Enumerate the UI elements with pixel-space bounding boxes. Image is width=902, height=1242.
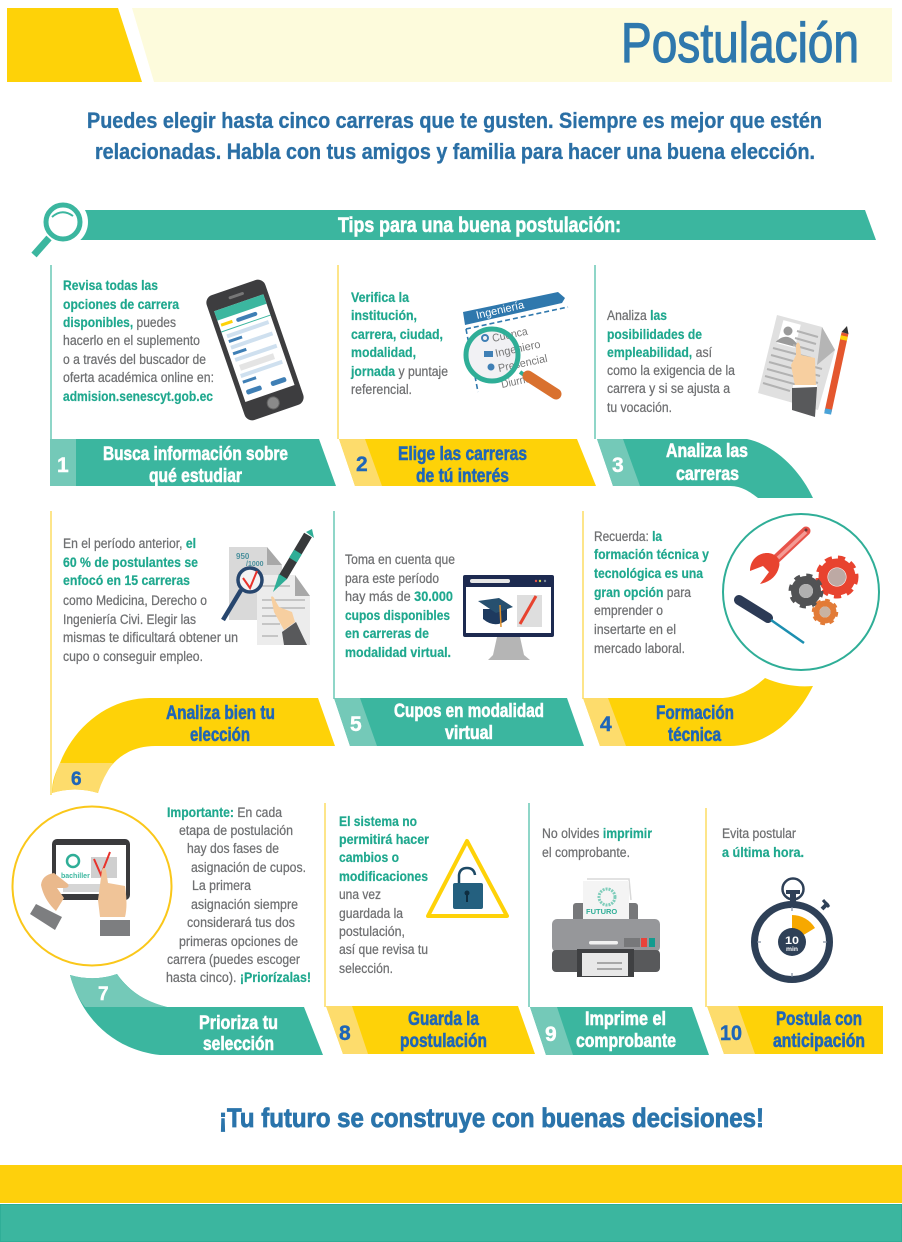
ribbon 5: 5 bbox=[350, 713, 362, 736]
text block 8: postulación, bbox=[339, 924, 405, 939]
icon: tablet circle: bachiller bbox=[61, 873, 90, 880]
icon: magnifier over career list bbox=[463, 292, 568, 394]
ribbon 7: selección bbox=[203, 1034, 274, 1055]
text block 9: el comprobante. bbox=[542, 845, 630, 860]
ribbon 8: Guarda la bbox=[408, 1009, 479, 1030]
text block 6: 60 % de postulantes se bbox=[63, 555, 198, 570]
ribbon 6: Analiza bien tu bbox=[166, 703, 275, 724]
text block 8: cambios o bbox=[339, 850, 399, 865]
text block 1: oferta académica online en: bbox=[63, 370, 214, 385]
text block 2: jornada y puntaje bbox=[350, 364, 448, 379]
text block 5: en carreras de bbox=[345, 626, 429, 641]
icon: printer: FUTURO bbox=[586, 907, 617, 916]
text block 10: a última hora. bbox=[722, 845, 804, 860]
panel: step 7 bbox=[12, 805, 323, 1055]
ribbon 2: de tú interés bbox=[416, 466, 509, 487]
text block 7: considerará tus dos bbox=[187, 915, 295, 930]
panel: step 5 bbox=[333, 511, 584, 746]
text block 2: institución, bbox=[351, 308, 417, 323]
panel: step 10 bbox=[705, 808, 883, 1054]
ribbon 1: Busca información sobre bbox=[103, 444, 288, 465]
text block 6: como Medicina, Derecho o bbox=[63, 593, 207, 608]
icon: documents, magnifier, pen and hand: /1000 bbox=[246, 561, 264, 568]
ribbon 4: Formación bbox=[656, 703, 734, 724]
ribbon 10 bbox=[707, 1006, 883, 1054]
ribbon 3: Analiza las bbox=[666, 441, 748, 462]
text block 7: asignación de cupos. bbox=[191, 860, 306, 875]
icon: magnifier over career list: Presencial bbox=[497, 353, 549, 375]
text block 8: así que revisa tu bbox=[339, 942, 428, 957]
ribbon 1: qué estudiar bbox=[149, 466, 242, 487]
text block 7: primeras opciones de bbox=[179, 934, 298, 949]
icon: tools circle bbox=[723, 514, 879, 670]
text block 7: Importante: En cada bbox=[167, 805, 282, 820]
text block 7: hay dos fases de bbox=[187, 841, 279, 856]
text block 3 bbox=[607, 308, 735, 415]
ribbon 10: Postula con bbox=[776, 1009, 862, 1030]
text block 4: emprender o bbox=[594, 603, 663, 618]
text block 5: para este período bbox=[345, 571, 439, 586]
ribbon 1 bbox=[50, 439, 336, 487]
intro text: Puedes elegir hasta cinco carreras que te gusten. Siempre es mejor que estén bbox=[87, 108, 822, 133]
icon: documents, magnifier, pen and hand: 950 bbox=[236, 552, 250, 561]
text block 8: una vez bbox=[339, 887, 381, 902]
icon: printer bbox=[552, 879, 660, 977]
icon: warning triangle with open lock bbox=[428, 841, 507, 916]
text block 7: hasta cinco). ¡Priorízalas! bbox=[166, 970, 311, 985]
icon: stopwatch: min bbox=[786, 946, 798, 953]
ribbon 3 bbox=[597, 439, 813, 498]
ribbon 7 bbox=[70, 974, 323, 1055]
text block 2 bbox=[350, 290, 448, 397]
panel: step 1 bbox=[50, 265, 336, 487]
panel: step 8 bbox=[324, 803, 535, 1054]
ribbon 7: Prioriza tu bbox=[199, 1013, 278, 1034]
header band bbox=[7, 8, 892, 82]
text block 7: carrera (puedes escoger bbox=[167, 952, 300, 967]
text block 6: enfocó en 15 carreras bbox=[63, 573, 190, 588]
text block 4: mercado laboral. bbox=[594, 641, 685, 656]
text block 6: mismas te dificultará obtener un bbox=[63, 630, 238, 645]
text block 5 bbox=[345, 552, 455, 660]
text block 8: selección. bbox=[339, 961, 393, 976]
text block 5: modalidad virtual. bbox=[345, 645, 451, 660]
icon: magnifier over career list: Ingeniero bbox=[494, 339, 542, 360]
text block 2: carrera, ciudad, bbox=[351, 327, 443, 342]
text block 1: disponibles, puedes bbox=[63, 315, 176, 330]
text block 7: etapa de postulación bbox=[179, 823, 293, 838]
text block 1: Revisa todas las bbox=[63, 278, 158, 293]
ribbon 4: 4 bbox=[600, 713, 612, 736]
text block 6: cupo o conseguir empleo. bbox=[63, 649, 203, 664]
text block 8: El sistema no bbox=[339, 814, 417, 829]
text block 3: como la exigencia de la bbox=[607, 363, 735, 378]
text block 5: cupos disponibles bbox=[345, 608, 450, 623]
ribbon 2: 2 bbox=[356, 453, 368, 476]
text block 1: opciones de carrera bbox=[63, 297, 179, 312]
ribbon 3: carreras bbox=[676, 464, 739, 485]
icon: document with hand and pencil bbox=[758, 315, 848, 417]
text block 8 bbox=[339, 814, 430, 976]
intro text bbox=[87, 108, 822, 164]
text block 2: modalidad, bbox=[351, 345, 416, 360]
text block 7: La primera bbox=[192, 878, 251, 893]
text block 6: Ingeniería Civi. Elegir las bbox=[63, 612, 196, 627]
text block 1 bbox=[63, 278, 214, 404]
text block 4: insertarte en el bbox=[594, 622, 676, 637]
text block 8: modificaciones bbox=[339, 869, 428, 884]
tips banner bbox=[80, 210, 876, 240]
panel: step 2 bbox=[337, 265, 596, 487]
icon: stopwatch bbox=[754, 878, 830, 980]
text block 3: tu vocación. bbox=[607, 400, 672, 415]
ribbon 10: 10 bbox=[720, 1022, 742, 1045]
icon: tablet circle bbox=[12, 806, 172, 966]
icon: stopwatch: 10 bbox=[785, 935, 799, 947]
ribbon 7: 7 bbox=[98, 984, 109, 1005]
panel: step 6 bbox=[50, 511, 335, 795]
panel: step 9 bbox=[528, 803, 709, 1055]
text block 5: hay más de 30.000 bbox=[345, 589, 453, 604]
ribbon 6 bbox=[52, 698, 335, 793]
text block 4: Recuerda: la bbox=[594, 529, 662, 544]
ribbon 1: 1 bbox=[57, 454, 69, 477]
icon: magnifier bbox=[34, 197, 88, 255]
text block 9 bbox=[542, 826, 653, 860]
icon: documents, magnifier, pen and hand bbox=[223, 529, 314, 645]
text block 6: En el período anterior, el bbox=[63, 536, 196, 551]
text block 6 bbox=[63, 536, 238, 664]
ribbon 6: elección bbox=[190, 725, 250, 746]
ribbon 8: 8 bbox=[339, 1022, 351, 1045]
icon: magnifier over career list: Diurno bbox=[500, 373, 532, 391]
text block 2: referencial. bbox=[351, 382, 412, 397]
text block 8: permitirá hacer bbox=[339, 832, 430, 847]
ribbon 8: postulación bbox=[400, 1031, 487, 1052]
ribbon 8 bbox=[326, 1006, 535, 1054]
text block 4: gran opción para bbox=[594, 585, 691, 600]
ribbon 5: virtual bbox=[445, 723, 493, 744]
icon: smartphone bbox=[204, 278, 306, 422]
ribbon 9: Imprime el bbox=[585, 1009, 666, 1030]
ribbon 4 bbox=[583, 678, 813, 746]
text block 2: Verifica la bbox=[351, 290, 409, 305]
text block 3: Analiza las bbox=[607, 308, 667, 323]
panel: step 4 bbox=[582, 511, 879, 746]
ribbon 6: 6 bbox=[71, 769, 82, 790]
ribbon 10: anticipación bbox=[773, 1031, 865, 1052]
text block 1: hacerlo en el suplemento bbox=[63, 333, 200, 348]
ribbon 3: 3 bbox=[612, 454, 624, 477]
icon: computer monitor bbox=[463, 575, 554, 660]
text block 8: guardada la bbox=[339, 906, 403, 921]
text block 1: o a través del buscador de bbox=[63, 352, 206, 367]
closing message: ¡Tu futuro se construye con buenas decisiones! bbox=[219, 1103, 764, 1133]
text block 4: tecnológica es una bbox=[594, 566, 703, 581]
icon: magnifier over career list: Cuenca bbox=[491, 326, 530, 345]
panel: step 3 bbox=[594, 265, 848, 498]
text block 5: Toma en cuenta que bbox=[345, 552, 455, 567]
text block 3: carrera y si se ajusta a bbox=[607, 381, 730, 396]
text block 10 bbox=[722, 826, 804, 860]
text block 10: Evita postular bbox=[722, 826, 796, 841]
ribbon 5 bbox=[334, 698, 584, 746]
text block 4 bbox=[594, 529, 709, 656]
footer bars bbox=[0, 1165, 902, 1242]
text block 3: empleabilidad, así bbox=[607, 345, 712, 360]
ribbon 9 bbox=[530, 1007, 709, 1055]
ribbon 2 bbox=[339, 439, 596, 487]
icon: magnifier over career list: Ingeniería bbox=[475, 299, 526, 322]
text block 3: posibilidades de bbox=[607, 327, 702, 342]
text block 7 bbox=[166, 805, 311, 985]
ribbon 5: Cupos en modalidad bbox=[394, 701, 544, 722]
ribbon 9: comprobante bbox=[576, 1031, 676, 1052]
ribbon 2: Elige las carreras bbox=[398, 444, 527, 465]
ribbon 4: técnica bbox=[668, 725, 721, 746]
text block 7: asignación siempre bbox=[191, 897, 298, 912]
tips banner: Tips para una buena postulación: bbox=[338, 214, 621, 237]
text block 1: admision.senescyt.gob.ec bbox=[63, 389, 213, 404]
text block 9: No olvides imprimir bbox=[542, 826, 653, 841]
title: Postulación bbox=[621, 11, 859, 74]
text block 4: formación técnica y bbox=[594, 547, 709, 562]
ribbon 9: 9 bbox=[545, 1023, 557, 1046]
intro text: relacionadas. Habla con tus amigos y familia para hacer una buena elección. bbox=[95, 139, 815, 164]
